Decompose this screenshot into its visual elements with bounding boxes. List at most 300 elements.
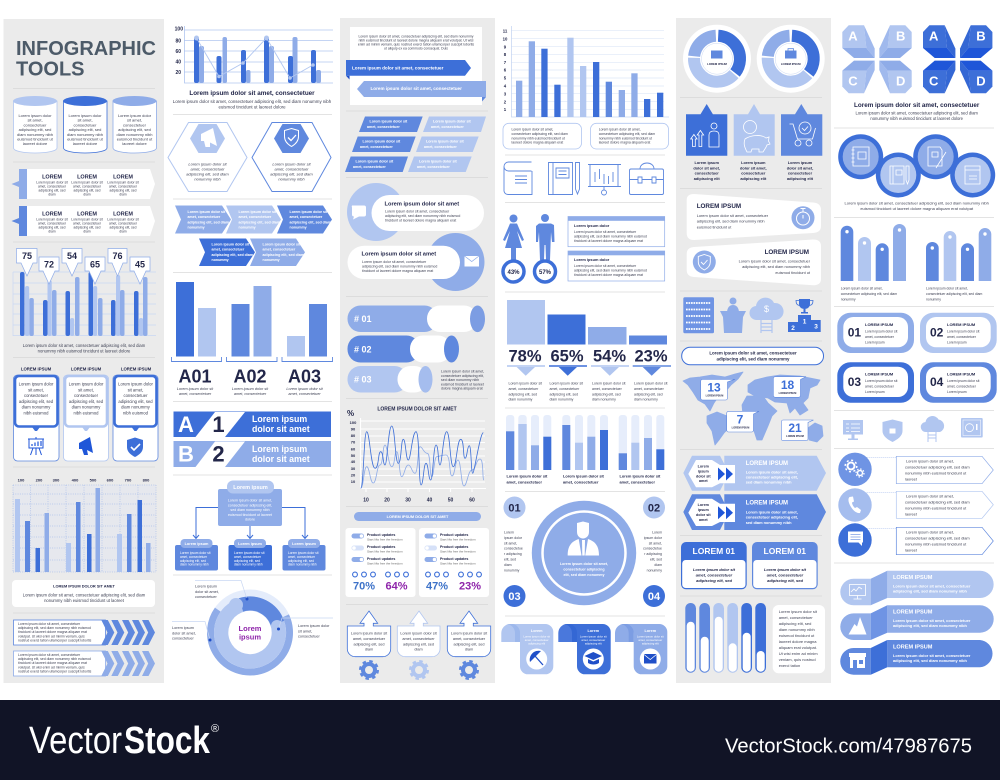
icon tiles: adipiscing elit bbox=[787, 176, 814, 181]
fold tabs: Lorem bbox=[644, 629, 657, 633]
circle list: Lorem ipsum dolor sit amet, bbox=[906, 494, 954, 498]
line chart: 90 bbox=[351, 426, 356, 432]
chevron process: amet, consectetuer bbox=[290, 215, 323, 219]
person circle diagram: sit amet, bbox=[504, 541, 517, 545]
vertical level pills bbox=[685, 603, 766, 673]
line chart: 70 bbox=[351, 440, 356, 444]
folded ribbons: Lorem ipsum dolor sit amet, consectetuer bbox=[893, 618, 971, 623]
line chart: 80 bbox=[351, 433, 356, 438]
chart caption: Lorem ipsum dolor sit amet, consectetuer adipiscing elit, sed diam bbox=[23, 343, 146, 348]
arrow rows: LOREM bbox=[42, 174, 62, 180]
hexagon arrows: consectetuer adipiscing elit, bbox=[746, 474, 798, 480]
line chart: % bbox=[347, 409, 354, 418]
folded ribbons bbox=[840, 571, 994, 675]
step bars with percentages: diam nonummy bbox=[508, 398, 533, 402]
ABCD light gems: B bbox=[896, 28, 905, 44]
cylinders: laoreet dolore bbox=[23, 141, 48, 146]
arrow rows: diam bbox=[48, 230, 56, 234]
grid bar chart: 700 bbox=[125, 478, 132, 482]
parallelogram labels: amet, consectetuer bbox=[424, 145, 457, 149]
numbered cards: amet, consectetuer bbox=[947, 384, 977, 388]
folded ribbons: Lorem ipsum dolor sit amet, consectetuer bbox=[893, 653, 971, 658]
icon tiles: Lorem ipsum bbox=[694, 160, 719, 165]
hexagons: nonummy nibh bbox=[194, 176, 221, 182]
arrow rows: Lorem ipsum dolor sit bbox=[107, 180, 139, 184]
hexagons: adipiscing elit, sed diam bbox=[270, 172, 313, 176]
A1 B2 banners: A bbox=[178, 412, 194, 437]
white note box bbox=[12, 580, 155, 607]
donut diagram: sit amet, bbox=[298, 629, 312, 633]
icon: stand circle bbox=[602, 190, 606, 195]
org flow chart: diam nonummy nibh bbox=[288, 563, 317, 567]
org flow chart: amet, consectetuer bbox=[234, 555, 262, 559]
column 1 background bbox=[4, 19, 164, 683]
ABCD light gems: A bbox=[848, 28, 858, 44]
line chart: 100 bbox=[350, 420, 357, 425]
person circle diagram: 02 bbox=[648, 502, 660, 514]
chevron process: amet, consectetuer bbox=[188, 215, 221, 219]
numbered cards: LOREM IPSUM bbox=[865, 322, 894, 327]
panel: column 6 shapes and lists bbox=[834, 25, 997, 675]
numbered cards: LOREM IPSUM bbox=[865, 372, 894, 376]
bar chart 1 to 11: 9 bbox=[504, 44, 507, 49]
up arrow cards and gears: amet, consectetuer bbox=[353, 637, 386, 641]
person circle diagram: Lorem ipsum dolor sit amet, bbox=[560, 562, 608, 566]
icon tiles: consectetuer bbox=[788, 171, 813, 176]
icon: trophy and podium: 1 bbox=[803, 318, 807, 326]
fold tabs: Lorem ipsum dolor sit bbox=[637, 634, 664, 638]
footer logo: Vector bbox=[29, 720, 122, 762]
parallelogram labels: Lorem ipsum dolor sit bbox=[426, 140, 465, 144]
icon cards: consectetuer bbox=[124, 393, 148, 398]
slanted cards: Lorem ipsum dolor sit amet, consectetuer bbox=[697, 213, 769, 218]
icon: cloud and ladder: $ bbox=[764, 304, 769, 314]
icon: message bbox=[848, 532, 863, 546]
donut charts: LOREM IPSUM bbox=[707, 62, 728, 66]
person circle diagram: consectetue bbox=[504, 547, 523, 551]
circle list: nonummy nibh euismod tincidunt ut bbox=[905, 470, 967, 476]
numbered cards: 02 bbox=[930, 326, 944, 340]
org flow chart: consectetuer adipiscing elit, bbox=[228, 503, 272, 507]
bar chart with callouts: 54 bbox=[67, 251, 77, 261]
chevron process: nonummy bbox=[212, 258, 229, 262]
line chart bbox=[347, 406, 486, 504]
A1 B2 banners: B bbox=[178, 442, 194, 466]
LOREM 01 cards: adipiscing elit, sed bbox=[696, 578, 732, 583]
chevron process: nonummy bbox=[188, 226, 205, 230]
chevron process: adipiscing elit, sed diam bbox=[262, 253, 304, 257]
icon: phone bbox=[848, 496, 861, 513]
person circle diagram: Lorem bbox=[504, 530, 514, 534]
icon cards: diam nonummy bbox=[22, 405, 51, 410]
arrow rows: amet, consectetuer bbox=[109, 222, 138, 226]
text boxes: consectetuer adipiscing elit, sed diam bbox=[512, 132, 568, 136]
org flow chart: Lorem ipsum dolor sit bbox=[180, 551, 211, 555]
cylinder bars: euismod tincidunt ut laoreet bbox=[441, 382, 484, 386]
column 5 background bbox=[676, 18, 831, 683]
folded ribbons: LOREM IPSUM bbox=[893, 644, 933, 650]
arrow rows: LOREM bbox=[77, 212, 97, 218]
A01 A02 A03 bars: A03 bbox=[288, 366, 321, 386]
hexagon arrows: ipsum bbox=[698, 508, 709, 512]
hexagons: nonummy nibh bbox=[278, 176, 305, 182]
ribbon note bbox=[346, 27, 486, 105]
arrow rows: adipiscing elit, sed bbox=[110, 226, 137, 230]
grid bar chart: 600 bbox=[107, 478, 114, 482]
info boxes bbox=[568, 216, 665, 281]
people percentages bbox=[503, 214, 556, 282]
slanted cards: Lorem ipsum dolor sit amet, consectetuer bbox=[739, 258, 811, 264]
folded ribbons: LOREM IPSUM bbox=[893, 610, 933, 616]
step bars with percentages: amet, consectetuer bbox=[550, 387, 580, 391]
icon: briefcase bbox=[630, 163, 664, 194]
registered mark: ® bbox=[211, 723, 219, 735]
cylinders: diam nonummy nibh bbox=[17, 132, 53, 137]
bubble cards: tincidunt ut laoreet dolore magna aliquam erat bbox=[362, 269, 433, 273]
icon: shield check white bbox=[284, 128, 298, 146]
chevron process: adipiscing elit, sed diam bbox=[238, 220, 280, 224]
chevron text bars bbox=[14, 620, 155, 676]
up arrow cards and gears bbox=[347, 611, 491, 678]
ABCD light gems bbox=[842, 25, 912, 93]
toggles and stats panel: Start lifts free the freedom bbox=[367, 538, 403, 542]
arrow rows: amet, consectetuer bbox=[38, 222, 67, 226]
circle list: nonummy nibh euismod tincidunt ut bbox=[905, 506, 967, 510]
icon: id board bbox=[711, 50, 722, 58]
chart title: Lorem ipsum dolor sit amet, consectetuer bbox=[189, 90, 315, 97]
cylinders: laoreet dolore bbox=[73, 141, 98, 146]
icon cards: nibh euismod bbox=[74, 410, 99, 416]
icon: envelope bbox=[464, 256, 479, 266]
icon: speaker at podium bbox=[720, 298, 746, 333]
hexagon arrows: LOREM IPSUM bbox=[746, 500, 788, 506]
chevron process: nonummy bbox=[262, 258, 280, 262]
fold tabs: adipiscing elit bbox=[528, 642, 545, 646]
numbered cards: Lorem ipsum dolor sit bbox=[865, 379, 897, 383]
panel: column 5 icons and map bbox=[676, 18, 831, 683]
slanted cards: euismod tincidunt ut bbox=[697, 224, 732, 229]
side text box: adipiscing elit, sed bbox=[779, 621, 811, 626]
hexagon arrows: Lorem ipsum dolor sit amet, bbox=[746, 510, 798, 514]
icon: gears bbox=[360, 662, 478, 678]
step bars with percentages: 65% bbox=[550, 348, 584, 366]
text boxes: nonummy nibh euismod tincidunt ut bbox=[512, 136, 565, 140]
step bars with percentages: amet, consectetuer bbox=[592, 387, 623, 391]
info boxes: adipiscing elit, sed diam nonummy nibh euismod bbox=[574, 234, 647, 238]
up arrow cards and gears: amet, consectetuer bbox=[402, 637, 435, 641]
ABCD dark gems: D bbox=[976, 74, 986, 88]
icon cards: adipiscing elit, sed bbox=[69, 399, 104, 404]
step bars with percentages: diam nonummy bbox=[592, 398, 616, 402]
bubble cards: Lorem ipsum dolor sit amet, consectetuer bbox=[385, 210, 450, 214]
cylinders: sit amet, bbox=[127, 118, 142, 123]
A1 B2 banners: dolor sit amet bbox=[252, 454, 310, 464]
parallelogram labels: amet, consectetuer bbox=[367, 125, 400, 129]
slanted cards bbox=[687, 194, 821, 285]
chevron process: amet, consectetuer bbox=[212, 248, 245, 252]
org flow chart: Lorem ipsum bbox=[238, 542, 263, 546]
chevron text bars: adipiscing elit, sed diam nonummy nibh euismod bbox=[18, 657, 91, 661]
chevron process: Lorem ipsum dolor sit bbox=[212, 242, 250, 246]
parallelogram labels: Lorem ipsum dolor sit bbox=[370, 120, 408, 124]
icon: businessman bbox=[568, 522, 599, 556]
cylinders: sit amet, bbox=[77, 118, 93, 123]
arrow rows: Lorem ipsum dolor sit bbox=[71, 218, 103, 222]
icon cards: nibh euismod bbox=[123, 410, 149, 416]
arrow rows: adipiscing elit, sed bbox=[74, 188, 101, 192]
person circle diagram: r adipiscing bbox=[504, 552, 522, 556]
fold tabs: Lorem bbox=[531, 629, 543, 633]
LOREM 01 cards: amet, consectetuer bbox=[696, 572, 733, 578]
numbered cards: 03 bbox=[848, 375, 861, 389]
arrow rows: Lorem ipsum dolor sit bbox=[36, 180, 68, 184]
donut diagram: Lorem ipsum dolor bbox=[298, 624, 330, 628]
numbered cards: 01 bbox=[848, 326, 861, 340]
side text box: exerci tation bbox=[779, 663, 800, 668]
icon cards: consectetuer bbox=[74, 393, 99, 398]
arrow rows: LOREM bbox=[77, 174, 97, 180]
up arrow cards and gears: Lorem ipsum dolor sit bbox=[400, 632, 438, 636]
slanted cards: euismod tincidunt ut bbox=[775, 270, 811, 275]
section description: nonummy nibh euismod tincidunt ut laoreet dolore bbox=[870, 116, 964, 121]
circle list: laoreet bbox=[905, 476, 918, 482]
ribbon note: Lorem ipsum dolor sit amet, consectetuer bbox=[370, 86, 462, 91]
icon: piggy bank and coin bbox=[744, 120, 770, 152]
grid bar chart: 500 bbox=[90, 478, 97, 482]
folded ribbons: Lorem ipsum dolor sit amet, consectetuer bbox=[893, 584, 971, 588]
org flow chart: euismod tincidunt ut laoreet bbox=[228, 513, 272, 517]
small solid icons bbox=[683, 297, 821, 333]
bubble cards: Lorem ipsum dolor sit amet bbox=[384, 202, 459, 208]
chevron process: nonummy bbox=[238, 226, 256, 230]
world map with callouts: 13 bbox=[707, 380, 721, 394]
rounded bars bbox=[841, 224, 991, 301]
arrow rows: adipiscing elit, sed bbox=[39, 226, 66, 230]
icon tiles: Lorem ipsum bbox=[741, 160, 766, 165]
A1 B2 banners: Lorem ipsum bbox=[252, 414, 307, 424]
A1 B2 banners: Lorem ipsum bbox=[252, 444, 307, 454]
line chart: 30 bbox=[351, 466, 356, 471]
parallelogram labels: Lorem ipsum dolor sit bbox=[356, 160, 394, 164]
person circle diagram: nonummy bbox=[504, 568, 520, 572]
parallelogram labels: amet, consectetuer bbox=[431, 125, 464, 129]
numbered cards: Lorem ipsum dolor sit bbox=[947, 330, 979, 334]
rounded bars: nonummy bbox=[926, 297, 941, 301]
progress columns: Lorem ipsum dolor sit bbox=[506, 474, 548, 478]
toggles and stats panel: Start lifts free the freedom bbox=[440, 550, 476, 554]
cylinder bars: Lorem ipsum dolor sit amet, bbox=[441, 370, 484, 374]
icon: stopwatch bbox=[796, 208, 810, 225]
icon tiles: adipiscing elit bbox=[740, 176, 767, 181]
chevron process bbox=[175, 206, 332, 266]
person circle diagram: 04 bbox=[648, 591, 661, 603]
panel: column 4 charts and people bbox=[501, 26, 671, 674]
LOREM 01 cards: LOREM 01 bbox=[693, 546, 735, 556]
icon cards: sit amet, bbox=[28, 387, 44, 392]
toggles and stats panel: 70% bbox=[353, 580, 375, 592]
chevron process: Lorem ipsum dolor sit bbox=[290, 210, 328, 214]
ribbon note: enim ad minim veniam, quis nostrud exerci tation ullamcorper suscipit lobortis bbox=[358, 42, 474, 46]
world map with callouts: LOREM IPSUM bbox=[706, 394, 723, 398]
slanted cards: LOREM IPSUM bbox=[697, 203, 741, 210]
person circle diagram: elit, sed bbox=[650, 558, 662, 562]
cylinders: euismod tincidunt ut bbox=[67, 136, 104, 142]
toggles and stats panel: Product updates bbox=[367, 545, 395, 549]
icon cards: Lorem ipsum dolor bbox=[69, 382, 104, 386]
numbered cards: Lorem ipsum bbox=[947, 390, 967, 394]
combo bar and line chart: 20 bbox=[175, 70, 181, 76]
toggles and stats panel: 47% bbox=[426, 580, 448, 592]
hexagons: adipiscing elit, sed diam bbox=[186, 172, 229, 176]
A01 A02 A03 bars: amet, consectetuer bbox=[288, 392, 321, 396]
bar chart with callouts bbox=[13, 248, 156, 336]
A01 A02 A03 bars: amet, consectetuer bbox=[179, 392, 212, 396]
panel: column 3 ribbons and charts bbox=[340, 18, 495, 683]
org flow chart: Lorem ipsum dolor sit amet, bbox=[228, 498, 272, 502]
toggles and stats panel: Start lifts free the freedom bbox=[440, 538, 476, 542]
chevron process: adipiscing elit, sed diam bbox=[212, 253, 253, 257]
person circle diagram: sit amet, bbox=[649, 541, 662, 545]
slanted cards: adipiscing elit, sed diam nonummy nibh bbox=[697, 219, 765, 224]
toggles and stats panel: Product updates bbox=[367, 557, 395, 561]
icon: cloud ladder bbox=[921, 416, 944, 442]
person circle diagram: r adipiscing bbox=[644, 552, 662, 556]
toggles and stats panel: Start lifts free the freedom bbox=[440, 562, 476, 566]
person circle diagram: diam bbox=[654, 563, 662, 567]
numbered cards: amet, consectetuer bbox=[865, 384, 895, 388]
bar chart 1 to 11: 11 bbox=[503, 28, 508, 33]
arrow rows: amet, consectetuer bbox=[109, 184, 138, 188]
up arrow cards and gears: Lorem ipsum dolor sit bbox=[351, 632, 388, 636]
icon tiles: consectetuer bbox=[695, 171, 719, 176]
step bars with percentages: diam nonummy bbox=[550, 398, 574, 402]
side text box: veniam, quis nostrud bbox=[779, 657, 816, 662]
person circle diagram: ipsum dolor bbox=[504, 536, 523, 540]
line chart: LOREM IPSUM DOLOR SIT AMET bbox=[377, 406, 457, 412]
person circle diagram: elit, sed diam nonummy bbox=[564, 573, 604, 577]
A01 A02 A03 bars: Lorem ipsum dolor sit bbox=[286, 387, 324, 391]
arrow rows: diam bbox=[83, 192, 91, 196]
icon: megaphone white bbox=[201, 128, 217, 147]
donut diagram: dolor sit amet, bbox=[172, 631, 196, 635]
chevron text bars: tincidunt ut laoreet dolore magna aliquam erat bbox=[18, 630, 87, 634]
icon: abacus bbox=[683, 297, 714, 333]
numbered cards: amet, consectetuer bbox=[865, 335, 895, 339]
chevron text bars: volutpat. Ut wisi enim ad minim veniam, quis bbox=[18, 665, 85, 669]
bar chart 1 to 11: 8 bbox=[504, 52, 507, 57]
numbered cards: Lorem ipsum bbox=[865, 340, 885, 344]
fold tabs bbox=[501, 624, 667, 674]
arrow rows bbox=[12, 169, 155, 236]
text boxes: consectetuer adipiscing elit, sed diam bbox=[599, 132, 655, 136]
icon tiles: dolor sit amet, bbox=[740, 165, 767, 170]
icon tiles: dolor sit amet, bbox=[693, 165, 720, 170]
step bars with percentages: adipiscing elit, sed bbox=[634, 392, 663, 396]
grid bar chart: 200 bbox=[36, 478, 43, 482]
bar chart 1 to 11: 10 bbox=[503, 36, 508, 41]
rounded bars: Lorem ipsum dolor sit amet, bbox=[926, 286, 968, 290]
arrow rows: Lorem ipsum dolor sit bbox=[71, 180, 103, 184]
person circle diagram: Lorem bbox=[652, 530, 662, 534]
chevron process: nonummy bbox=[290, 226, 307, 230]
LOREM 01 cards: Lorem ipsum dolor sit bbox=[693, 567, 736, 572]
cylinders: sit amet, bbox=[27, 118, 43, 123]
hexagons bbox=[168, 122, 331, 192]
world map with callouts: 18 bbox=[781, 378, 794, 392]
line chart: 50 bbox=[351, 453, 356, 458]
donut diagram: consectetuer bbox=[298, 635, 320, 639]
pale icon row bbox=[843, 416, 983, 442]
donut diagram bbox=[172, 580, 333, 685]
icon: presentation board bbox=[28, 437, 44, 455]
step bars with percentages: 23% bbox=[634, 348, 668, 366]
world map with callouts: 21 bbox=[788, 421, 802, 435]
parallelogram labels: Lorem ipsum dolor sit bbox=[433, 120, 472, 124]
circle list: consectetuer adipiscing elit, sed diam bbox=[905, 536, 970, 540]
title pill: Lorem ipsum dolor sit amet, consectetuer bbox=[709, 350, 797, 356]
numbered cards: LOREM IPSUM bbox=[947, 322, 976, 327]
circles caption: Lorem ipsum dolor sit amet, consectetuer adipiscing elit, sed diam nonummy nibh bbox=[845, 200, 989, 206]
toggles and stats panel: Start lifts free the freedom bbox=[367, 550, 403, 554]
ribbon note: ut aliquip ex ea commodo consequat. Duis bbox=[384, 46, 448, 50]
combo bar and line chart: 60 bbox=[175, 49, 181, 55]
ABCD dark gems: C bbox=[929, 74, 939, 88]
icon cards bbox=[14, 366, 158, 461]
A01 A02 A03 bars bbox=[172, 282, 332, 396]
cylinder bars: # 01 bbox=[354, 314, 372, 324]
icon: shield bbox=[127, 438, 143, 457]
org flow chart: amet, consectetuer bbox=[288, 555, 316, 559]
step bars with percentages: diam nonummy bbox=[634, 398, 658, 402]
cylinder bars: # 03 bbox=[354, 374, 372, 384]
cylinders: Lorem ipsum dolor bbox=[118, 113, 152, 118]
icon: mountain flag bbox=[848, 617, 866, 634]
info boxes: Lorem ipsum dolor bbox=[574, 257, 610, 262]
arrow rows: diam bbox=[119, 230, 127, 234]
icon tiles: consectetuer bbox=[741, 171, 766, 176]
icon: trophy and podium: 3 bbox=[814, 324, 818, 330]
hexagon arrows: consectetuer adipiscing elit, bbox=[746, 515, 798, 520]
person circle diagram: ipsum dolor bbox=[644, 536, 663, 540]
donut diagram: Lorem bbox=[239, 624, 262, 633]
toggles and stats panel: Product updates bbox=[367, 533, 395, 537]
text boxes: Lorem ipsum dolor sit amet, bbox=[599, 128, 641, 132]
arrow rows: LOREM bbox=[42, 212, 62, 218]
icon: megaphone bbox=[79, 437, 93, 455]
arrow rows: adipiscing elit, sed bbox=[110, 188, 137, 192]
title pill: adipiscing elit, sed diam nonummy bbox=[717, 356, 790, 361]
ribbon note: Lorem ipsum dolor sit amet, consectetuer bbox=[352, 66, 444, 70]
step bars with percentages: adipiscing elit, sed bbox=[508, 392, 537, 396]
arrow rows: Lorem ipsum dolor sit bbox=[36, 218, 68, 222]
circles caption: euismod tincidunt ut laoreet dolore magna aliquam erat volutpat bbox=[860, 206, 974, 211]
toggles and stats panel: Product updates bbox=[440, 557, 468, 561]
hexagons: Lorem ipsum dolor sit bbox=[272, 162, 312, 166]
hexagon arrows bbox=[683, 456, 826, 530]
rounded bars: consectetuer adipiscing elit, sed diam bbox=[926, 292, 983, 296]
rounded bars: nonummy bbox=[841, 297, 856, 301]
icon: monitor checklist bbox=[843, 420, 863, 440]
white note box: Lorem ipsum dolor sit amet, consectetuer adipiscing elit, sed diam bbox=[23, 592, 146, 598]
org flow chart: diam nonummy nibh bbox=[180, 563, 209, 567]
person circle diagram: consectetue bbox=[643, 547, 662, 551]
hexagon arrows: dolor sit bbox=[696, 474, 711, 478]
chevron text bars: adipiscing elit, sed diam nonummy nibh euismod bbox=[18, 626, 91, 630]
icon cards: Lorem ipsum dolor bbox=[118, 382, 153, 386]
arrow rows: amet, consectetuer bbox=[38, 184, 67, 188]
folded ribbons: adipiscing elit, sed diam nonummy nibh bbox=[893, 623, 968, 628]
hexagon arrows: sed diam nonummy nibh bbox=[746, 480, 792, 484]
